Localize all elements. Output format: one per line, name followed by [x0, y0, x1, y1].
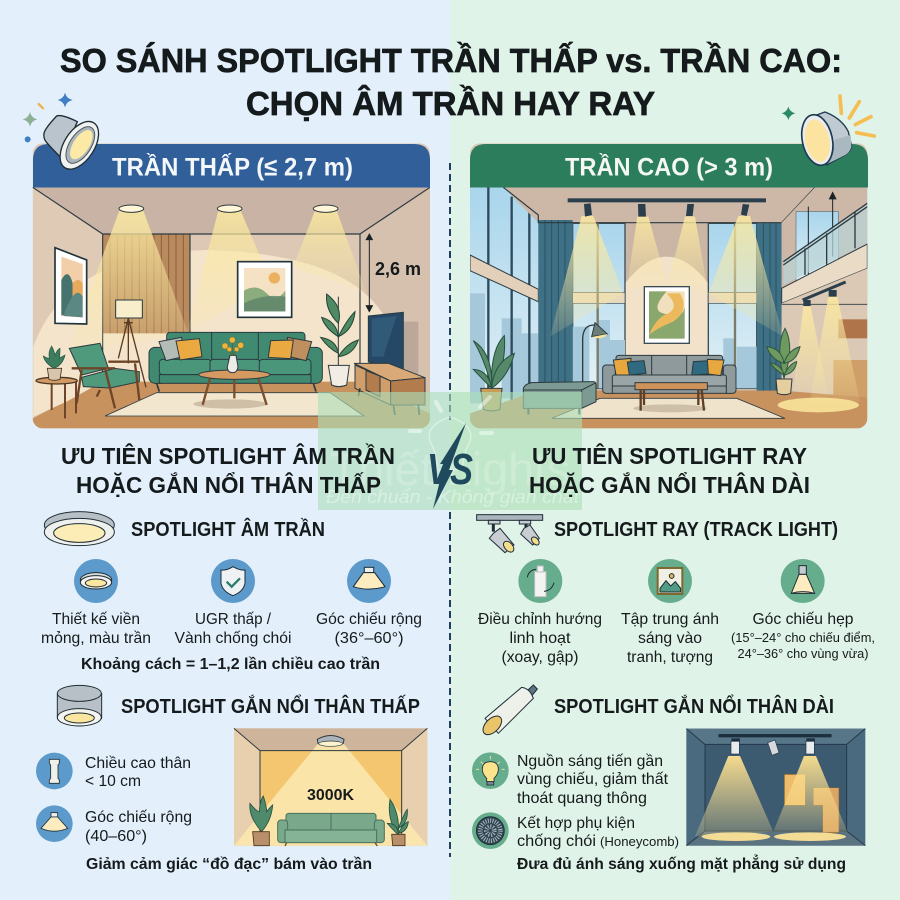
left subheading: HOẶC GẮN NỔI THÂN THẤP: [76, 471, 381, 498]
watermark: [318, 392, 582, 510]
right plant: [767, 328, 800, 395]
watermark: Đèn chuẩn - Không gian chất: [326, 487, 580, 507]
plants: [250, 796, 408, 835]
fixtures: [731, 739, 815, 755]
header: low ceiling: TRẦN THẤP (≤ 2,7 m): [112, 152, 353, 182]
feature icons: [36, 753, 73, 842]
feature labels: (Honeycomb): [600, 834, 679, 849]
icon: long cylinder: [480, 685, 537, 738]
feature labels: (xoay, gập): [502, 649, 578, 666]
title: SO SÁNH SPOTLIGHT TRẦN THẤP vs. TRẦN CAO:: [60, 42, 842, 80]
center dashed divider: [449, 163, 451, 857]
feature labels: [517, 753, 679, 850]
left subheading: ƯU TIÊN SPOTLIGHT ÂM TRẦN: [61, 442, 395, 469]
section: track spotlight: [477, 515, 875, 666]
feature icons: [74, 559, 391, 603]
floor lamp: [583, 323, 607, 382]
feature labels: Chiều cao thân: [85, 755, 191, 772]
section: low surface spotlight: [36, 685, 427, 873]
header: high ceiling: [470, 144, 868, 188]
coffee table: [635, 383, 707, 411]
heading: SPOTLIGHT RAY (TRACK LIGHT): [554, 519, 838, 541]
painting on back wall: [238, 262, 292, 317]
feature labels: Vành chống chói: [174, 630, 292, 647]
feature labels: UGR thấp /: [195, 611, 272, 628]
feature labels: 24°–36° cho vùng vừa): [738, 647, 868, 661]
scene: high ceiling living room: [470, 143, 867, 428]
icon: track light: [477, 515, 543, 554]
potted plant: [321, 294, 358, 387]
sofa: [278, 813, 384, 846]
sofa: [603, 355, 736, 393]
coffee table with vase: [199, 337, 270, 405]
mezzanine: [782, 187, 867, 398]
right subheading: ƯU TIÊN SPOTLIGHT RAY: [532, 442, 807, 469]
header: low ceiling: [33, 144, 430, 188]
track and spotlights: [568, 198, 846, 306]
feature labels: linh hoạt: [510, 630, 571, 647]
heading: SPOTLIGHT ÂM TRẦN: [131, 517, 325, 541]
height label: 2,6 m: [375, 259, 421, 279]
feature labels: mỏng, màu trần: [41, 630, 151, 647]
title: [60, 42, 842, 123]
right subheading: [529, 442, 810, 498]
watermark: Thiết Lights: [330, 443, 570, 495]
feature labels: Góc chiếu hẹp: [752, 611, 854, 628]
icon: low surface cylinder: [57, 685, 102, 726]
light beams: [67, 211, 367, 353]
feature labels: Tập trung ánh: [621, 611, 719, 628]
VS badge: VS: [427, 445, 473, 494]
center windows: [573, 223, 757, 388]
note: Đưa đủ ánh sáng xuống mặt phẳng sử dụng: [517, 854, 846, 873]
feature icons: [472, 752, 509, 849]
left plant: [473, 336, 514, 411]
heading: SPOTLIGHT GẮN NỔI THÂN DÀI: [554, 694, 834, 718]
ottoman: [523, 382, 596, 414]
feature labels: (36°–60°): [334, 630, 404, 647]
feature labels: Thiết kế viền: [52, 611, 140, 628]
dark room illustration: [686, 729, 865, 846]
feature labels: sáng vào: [638, 630, 702, 647]
painting: [644, 287, 689, 343]
feature labels: Điều chỉnh hướng: [478, 611, 602, 628]
painting on left wall: [55, 248, 87, 324]
feature labels: [85, 755, 192, 845]
feature labels: < 10 cm: [85, 773, 141, 790]
feature labels: (40–60°): [85, 828, 147, 845]
floor lamp: [116, 300, 146, 387]
title: CHỌN ÂM TRẦN HAY RAY: [246, 85, 655, 123]
ceiling downlights: [119, 205, 338, 212]
feature labels: Nguồn sáng tiến gần: [517, 753, 663, 770]
feature labels: [41, 611, 422, 647]
feature labels: Kết hợp phụ kiện: [517, 815, 635, 832]
curtains: [538, 220, 782, 392]
icon: surface spotlight with rays: [782, 96, 874, 168]
section: long surface spotlight: [472, 685, 865, 873]
ceiling height arrow: [366, 233, 373, 312]
TV and cabinet: [354, 312, 425, 415]
heading: SPOTLIGHT GẮN NỔI THÂN THẤP: [121, 694, 420, 718]
icon: recessed disc: [44, 512, 114, 546]
side table with plant: [36, 346, 77, 418]
icon: recessed spotlight with sparkles: [23, 93, 106, 176]
feature labels: (15°–24° cho chiếu điểm,: [731, 631, 875, 645]
artworks: [784, 774, 805, 805]
note: Giảm cảm giác “đồ đạc” bám vào trần: [86, 856, 372, 873]
header: high ceiling: TRẦN CAO (> 3 m): [565, 152, 773, 182]
feature labels: thoát quang thông: [517, 790, 647, 807]
sofa: [149, 332, 322, 392]
spacing note: Khoảng cách = 1–1,2 lần chiều cao trần: [81, 656, 380, 673]
VS badge: [427, 423, 473, 509]
beams: [695, 756, 847, 837]
colour temperature label: 3000K: [307, 787, 354, 804]
armchair: [69, 343, 139, 408]
feature labels: vùng chiếu, giảm thất: [517, 771, 669, 788]
right subheading: HOẶC GẮN NỔI THÂN DÀI: [529, 471, 810, 498]
feature labels: chống chói: [517, 833, 596, 850]
feature labels: Góc chiếu rộng: [85, 809, 192, 826]
light beams: [550, 216, 860, 402]
feature labels: tranh, tượng: [627, 649, 713, 666]
room illustration: [234, 728, 427, 846]
scene: low ceiling living room: [33, 143, 430, 428]
feature labels: [478, 611, 875, 666]
feature labels: Góc chiếu rộng: [316, 611, 422, 628]
feature icons: [518, 559, 825, 603]
left subheading: [61, 442, 395, 498]
section: recessed spotlight: [41, 512, 422, 673]
